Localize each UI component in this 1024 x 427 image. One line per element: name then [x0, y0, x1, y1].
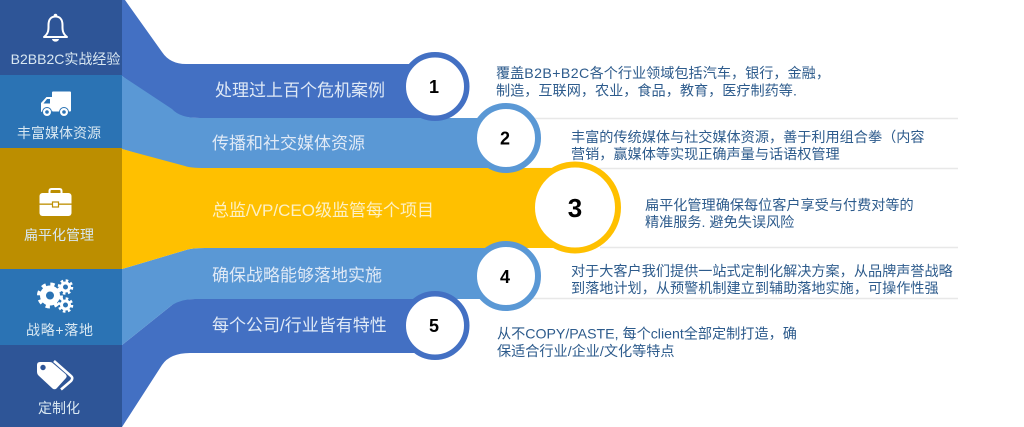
- description 2: 丰富的传统媒体与社交媒体资源，善于利用组合拳（内容: [571, 129, 925, 145]
- nav block 1: [0, 0, 122, 75]
- description 3: 精准服务. 避免失误风险: [645, 214, 794, 230]
- description 2: 营销，赢媒体等实现正确声量与话语权管理: [571, 146, 840, 162]
- circle 4: 4: [500, 267, 510, 287]
- band heading 3: 总监/VP/CEO级监管每个项目: [212, 201, 434, 220]
- circle 1: [403, 55, 467, 118]
- flow band 3: [122, 149, 575, 269]
- circle 4: [474, 244, 538, 308]
- circle 5: [403, 294, 467, 357]
- circle 2: 2: [500, 128, 510, 148]
- nav label 3: 扁平化管理: [24, 227, 94, 243]
- band heading 4: 确保战略能够落地实施: [212, 266, 382, 285]
- nav label 1: B2BB2C实战经验: [11, 51, 120, 67]
- description 3: 扁平化管理确保每位客户享受与付费对等的: [645, 197, 914, 213]
- description 4: 到落地计划，从预警机制建立到辅助落地实施，可操作性强: [571, 280, 939, 296]
- icon: truck: [41, 92, 71, 116]
- nav block 5: [0, 345, 122, 427]
- description 5: 保适合行业/企业/文化等特点: [497, 343, 675, 359]
- icon: briefcase: [40, 189, 72, 216]
- band heading 2: 传播和社交媒体资源: [212, 134, 365, 153]
- divider lines: [530, 118, 958, 298]
- icon: tags: [37, 361, 72, 390]
- nav label 2: 丰富媒体资源: [17, 125, 101, 141]
- panel: left navigation column: [0, 0, 122, 427]
- icon: gears: [39, 280, 72, 312]
- description 1: 制造，互联网，农业，食品，教育，医疗制药等.: [496, 82, 797, 98]
- description 1: 覆盖B2B+B2C各个行业领域包括汽车，银行，金融，: [496, 65, 830, 81]
- circle 5: 5: [429, 316, 439, 336]
- flow band 5: [122, 299, 435, 427]
- icon: bell: [44, 14, 67, 42]
- description 5: 从不COPY/PASTE, 每个client全部定制打造，确: [497, 326, 797, 342]
- circle 2: [474, 106, 538, 170]
- band heading 1: 处理过上百个危机案例: [215, 81, 385, 100]
- nav block 4: [0, 269, 122, 345]
- description 4: 对于大客户我们提供一站式定制化解决方案，从品牌声誉战略: [571, 263, 953, 279]
- flow band 2: [122, 76, 506, 168]
- nav block 3: [0, 148, 122, 269]
- flow band 1: [122, 0, 435, 118]
- nav label 5: 定制化: [38, 400, 80, 416]
- nav block 2: [0, 75, 122, 148]
- circle 1: 1: [429, 77, 439, 97]
- circle 3: [532, 164, 618, 250]
- circle 3: 3: [568, 193, 582, 223]
- nav label 4: 战略+落地: [26, 322, 93, 338]
- flow band 4: [122, 248, 506, 345]
- band heading 5: 每个公司/行业皆有特性: [212, 316, 387, 335]
